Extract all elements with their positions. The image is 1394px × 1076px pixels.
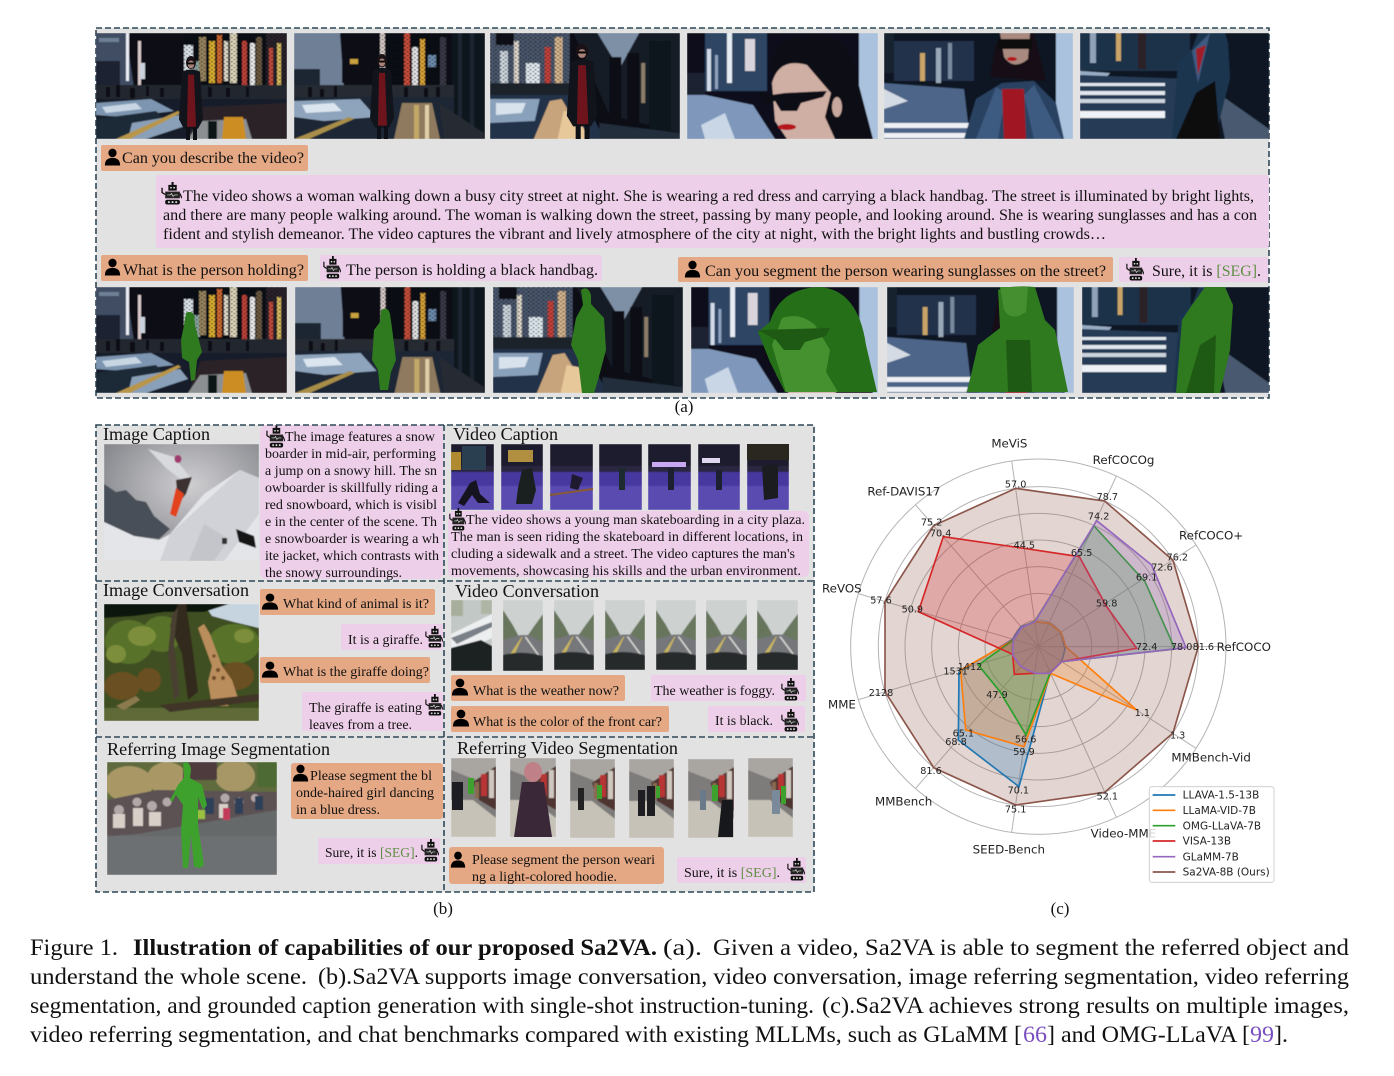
bubble: hoodie question: ng a light-colored hoodie.: [472, 869, 617, 884]
radar chart (c): [822, 437, 1274, 882]
model answer: handbag: The person is holding a black handbag.: [346, 262, 598, 279]
figure caption: (c).Sa2VA achieves strong results on multiple images,: [822, 993, 1349, 1018]
value labels: 65.1: [953, 729, 974, 740]
bubble: image description: [260, 425, 443, 580]
figure caption: video referring segmentation, and chat benchmarks compared with existing MLLMs, such as GLaMM [: [30, 1022, 1022, 1047]
axis labels: SEED-Bench: [973, 843, 1045, 857]
bubble: video description: The video shows a young man skateboarding in a city plaza.: [466, 512, 805, 527]
figure caption: understand the whole scene.: [30, 964, 307, 989]
bubble: SEG answer: [318, 838, 440, 864]
bubble: image description: ite jacket, which contrasts with: [265, 548, 439, 563]
bubble: segment question: in a blue dress.: [296, 802, 380, 817]
legend: OMG-LLaVA-7B: [1183, 820, 1261, 832]
value labels: 44.5: [1014, 540, 1035, 551]
skateboarding frames: [451, 444, 789, 510]
series: Sa2VA-8B: [885, 488, 1198, 805]
bubble: hoodie question: [449, 847, 664, 884]
value labels: 65.5: [1071, 548, 1092, 559]
value labels: [869, 479, 1214, 815]
series: VISA-13B: [918, 537, 1137, 674]
figure caption: Figure 1.: [30, 935, 118, 960]
axis labels: RefCOCO+: [1179, 529, 1243, 543]
sub-panel: Referring Image Segmentation: [96, 737, 444, 892]
legend: LLaMA-VID-7B: [1183, 805, 1256, 817]
bubble: image description: the snowy surroundings.: [265, 565, 402, 580]
heading: Image Caption: Image Caption: [103, 424, 210, 444]
bubble: black answer: It is black.: [715, 713, 773, 728]
value labels: 1.3: [1170, 731, 1185, 742]
figure caption: segmentation, and grounded caption generation with single-shot instruction-tuning.: [30, 993, 814, 1018]
model answer: handbag: [320, 255, 602, 281]
value labels: 59.8: [1096, 598, 1117, 609]
bubble: foggy answer: The weather is foggy.: [654, 683, 775, 698]
bubble: segment question: [291, 763, 443, 819]
bubble: giraffe answer: It is a giraffe.: [348, 632, 423, 647]
figure caption: 66: [1023, 1022, 1047, 1047]
value labels: 76.2: [1167, 553, 1188, 564]
photo: giraffe: [104, 604, 260, 721]
foggy road frames: [451, 600, 798, 671]
axis labels: MMBench-Vid: [1171, 750, 1251, 764]
bubble: car question: What is the color of the front car?: [473, 714, 662, 729]
bubble: image description: owboarder is skillfully riding a: [265, 480, 438, 495]
bubble: image description: e snowboarder is wearing a wh: [265, 531, 439, 546]
bubble: video description: movements, showcasing his skills and the urban environment.: [451, 563, 801, 578]
value labels: 52.1: [1097, 791, 1118, 802]
heading: Image Conversation: Image Conversation: [103, 580, 249, 600]
value labels: 1531: [943, 666, 968, 677]
figure caption: ] and OMG-LLaVA [: [1047, 1022, 1250, 1047]
sub-panel: Video Caption: [444, 424, 814, 581]
bubble: SEG answer: [677, 857, 806, 883]
bubble: foggy answer: [651, 675, 806, 701]
panel (a): video chat demo: [96, 28, 1269, 398]
bottom segmented frames: [96, 286, 1269, 393]
sub-panel: Referring Video Segmentation: [444, 737, 814, 892]
bubble: black answer: [708, 706, 805, 732]
bubble: image description: red snowboard, which is visibl: [265, 497, 437, 512]
bubble: image description: boarder in mid-air, performing: [265, 446, 436, 461]
bubble: eating answer: The giraffe is eating: [309, 700, 422, 715]
value labels: 78.0: [1171, 642, 1192, 653]
caption label (c): (c): [1051, 899, 1069, 918]
value labels: 56.6: [1015, 735, 1036, 746]
panel (a) dashed frame: [96, 28, 1269, 398]
value labels: 2128: [869, 688, 893, 699]
bubble: giraffe answer: [341, 624, 443, 650]
figure caption: [30, 935, 1350, 1047]
value labels: 1412: [958, 662, 982, 673]
value labels: 59.9: [1013, 747, 1035, 758]
value labels: 1.1: [1135, 708, 1150, 719]
value labels: 72.4: [1136, 642, 1157, 653]
model answer: video description: and there are many people walking around. The woman is walking down the street, passing by many people, and looking around. She is wearing sunglasses and has a con: [163, 207, 1257, 224]
model answer: video description: [156, 175, 1269, 248]
figure caption: 99: [1250, 1022, 1274, 1047]
user question: holding: [101, 255, 308, 281]
bubble: car question: [451, 706, 669, 732]
value labels: 81.6: [1193, 642, 1214, 653]
bubble: eating answer: [302, 692, 443, 732]
bubble: image description: a jump on a snowy hill. The sn: [265, 463, 437, 478]
series: LLaMA-VID-7B: [961, 622, 1137, 747]
series: GLaMM-7B: [1013, 521, 1186, 673]
value labels: 57.0: [1005, 479, 1026, 490]
user question: segment: Can you segment the person wearing sunglasses on the street?: [705, 263, 1106, 280]
model answer: SEG: Sure, it is [SEG].: [1152, 263, 1261, 280]
figure caption: Given a video, Sa2VA is able to segment the referred object and: [713, 935, 1350, 960]
axis labels: MMBench: [875, 795, 932, 809]
user question: segment: [678, 257, 1113, 282]
value labels: 57.6: [870, 595, 892, 606]
series: LLAVA-1.5-13B: [958, 622, 1065, 787]
sub-panel: Image Conversation: [96, 580, 444, 737]
sub-panel: Image Caption: [96, 424, 444, 581]
bubble: segment question: Please segment the bl: [310, 768, 432, 783]
bubble: doing question: What is the giraffe doing?: [283, 664, 429, 679]
bubble: weather question: [451, 675, 625, 701]
axis labels: ReVOS: [822, 582, 862, 596]
bubble: SEG answer: Sure, it is [SEG].: [325, 845, 418, 860]
bubble: SEG answer: Sure, it is [SEG].: [684, 865, 780, 880]
model answer: SEG: [1119, 257, 1268, 282]
legend: VISA-13B: [1183, 836, 1231, 848]
axis labels: MeViS: [991, 437, 1027, 451]
axis labels: RefCOCO: [1217, 640, 1271, 654]
bubble: eating answer: leaves from a tree.: [309, 717, 412, 732]
legend: GLaMM-7B: [1183, 851, 1239, 863]
bubble: image description: e in the center of the scene. Th: [265, 514, 437, 529]
bubble: image description: The image features a snow: [285, 429, 435, 444]
value labels: 69.1: [1136, 573, 1157, 584]
value labels: 75.2: [921, 518, 942, 529]
figure caption: (b).Sa2VA supports image conversation, video conversation, image referring segmentation, video referring: [318, 964, 1350, 989]
sub-panel: Video Conversation: [444, 581, 814, 737]
figure caption: Illustration of capabilities of our proposed Sa2VA.: [133, 935, 657, 960]
figure caption: (a).: [663, 935, 702, 960]
top video frames: [96, 33, 1269, 140]
bubble: hoodie question: Please segment the person weari: [472, 852, 655, 867]
value labels: 74.2: [1088, 511, 1109, 522]
axis labels: RefCOCOg: [1093, 453, 1154, 467]
model answer: video description: fident and stylish demeanor. The video captures the vibrant and lively atmosphere of the city at night, with the bright lights and bustling crowds…: [163, 226, 1106, 243]
axis labels: Ref-DAVIS17: [867, 485, 940, 499]
photo: snowboarder: [104, 444, 259, 561]
bubble: segment question: onde-haired girl dancing: [296, 785, 434, 800]
value labels: 70.4: [930, 528, 951, 539]
bubble: video description: [448, 508, 809, 578]
bubble: doing question: [260, 657, 430, 683]
model answer: video description: The video shows a woman walking down a busy city street at night. She is wearing a red dress and carrying a black handbag. The street is illuminated by bright lights,: [183, 188, 1254, 205]
user question: describe: Can you describe the video?: [122, 150, 304, 167]
value labels: 50.9: [902, 605, 923, 616]
caption label (b): (b): [433, 899, 453, 918]
axis labels: Video-MME: [1091, 826, 1156, 840]
axis labels: MME: [828, 697, 856, 711]
heading: Video Conversation: Video Conversation: [455, 581, 599, 601]
user question: describe: [101, 145, 308, 171]
caption label (a): (a): [675, 397, 693, 416]
value labels: 78.7: [1097, 492, 1118, 503]
bubble: video description: cluding a sidewalk and a street. The video captures the man's: [451, 546, 795, 561]
heading: Referring Video Segmentation: Referring Video Segmentation: [457, 738, 678, 758]
bubble: animal question: [260, 589, 435, 615]
panel (b): capability examples: [96, 424, 814, 892]
value labels: 75.1: [1005, 804, 1026, 815]
mall frames: [451, 758, 793, 838]
figure caption: ].: [1274, 1022, 1288, 1047]
axis labels: [822, 437, 1271, 857]
value labels: 72.6: [1151, 563, 1173, 574]
photo: segmented dancer: [105, 760, 277, 875]
user question: holding: What is the person holding?: [123, 262, 304, 279]
value labels: 68.8: [945, 737, 967, 748]
value labels: 70.1: [1008, 785, 1029, 796]
legend: Sa2VA-8B (Ours): [1183, 867, 1270, 879]
bubble: animal question: What kind of animal is it?: [283, 596, 429, 611]
value labels: 47.9: [986, 690, 1008, 701]
bubble: weather question: What is the weather now?: [473, 683, 619, 698]
value labels: 81.6: [920, 766, 942, 777]
legend: [1149, 787, 1274, 882]
heading: Video Caption: Video Caption: [453, 424, 558, 444]
bubble: video description: The man is seen riding the skateboard in different locations, in: [451, 529, 803, 544]
series: OMG-LLaVA-7B: [978, 526, 1175, 735]
heading: Referring Image Segmentation: Referring Image Segmentation: [107, 739, 330, 759]
legend: LLAVA-1.5-13B: [1183, 790, 1259, 802]
